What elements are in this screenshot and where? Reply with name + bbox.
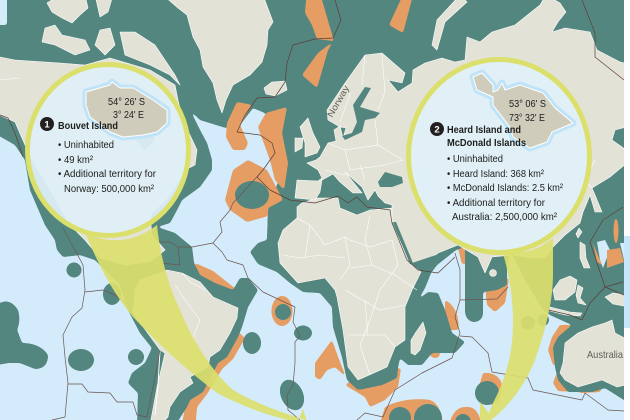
text block: Bouvet Island: • Additional territory for [58, 169, 157, 180]
text block: Heard Island and McDonald Islands: • Additional territory for [447, 198, 546, 209]
Taiwan and Philippines [576, 228, 582, 238]
callout circle 1 [28, 64, 188, 236]
text block: Heard Island and McDonald Islands: McDonald Islands [447, 138, 526, 149]
text block: Heard Island and McDonald Islands: • Uninhabited [447, 154, 503, 165]
Africa [278, 198, 421, 380]
map label: Norway: Norway [325, 83, 352, 119]
text block: Bouvet Island: • Uninhabited [58, 140, 114, 151]
Eurasia [295, 0, 630, 273]
Novaya Zemlya [432, 0, 467, 50]
coordinates: Heard Island: 53° 06' S [509, 99, 546, 110]
Greenland [163, 0, 273, 113]
text block: Bouvet Island [40, 117, 157, 195]
coordinates: Bouvet: 3° 24' E [113, 110, 144, 121]
text block: Heard Island and McDonald Islands: Heard Island and [447, 125, 521, 136]
Caspian Sea [423, 170, 431, 196]
Iceland [264, 81, 287, 96]
inland seas [135, 87, 445, 268]
map label: Australia: Australia [587, 349, 623, 361]
coordinates: Bouvet [108, 97, 145, 121]
callout pointer: Bouvet Island [86, 225, 308, 420]
open ocean pockets in the western Pacific [593, 219, 624, 268]
right edge strip [624, 0, 630, 420]
text block: Bouvet Island: • 49 km² [58, 155, 94, 166]
New Guinea [605, 293, 630, 308]
callout pointer: Heard Island [480, 238, 553, 420]
overlapping claims: orange zones in the North Atlantic and Arctic [225, 0, 502, 420]
Sulawesi and eastern islands [576, 285, 586, 305]
text block: Heard Island and McDonald Islands [430, 122, 564, 223]
Java and Lesser Sunda [550, 307, 582, 316]
island zones: teal blobs [0, 181, 549, 420]
text block: Heard Island and McDonald Islands: • Heard Island: 368 km² [447, 169, 545, 180]
text block: Heard Island and McDonald Islands: Australia: 2,500,000 km² [452, 212, 558, 223]
text block: Bouvet Island: 1 [44, 120, 50, 130]
callout circle 2 [408, 60, 590, 252]
text block: Heard Island and McDonald Islands: 2 [434, 124, 440, 136]
Arctic Canada islands [47, 0, 88, 23]
Madagascar [411, 322, 426, 355]
coordinates: Bouvet: 54° 26' S [108, 97, 145, 108]
United Kingdom [300, 118, 320, 157]
Borneo [553, 276, 577, 300]
South America [133, 270, 238, 420]
coordinates: Heard Island: 73° 32' E [509, 113, 545, 124]
overlapping claims beneath the coastal zones [181, 240, 606, 420]
island map: Heard and McDonald [473, 73, 573, 148]
Sri Lanka [490, 270, 496, 276]
North America [0, 56, 197, 265]
Ireland [295, 138, 303, 152]
Australia [560, 320, 630, 387]
text block: Bouvet Island: Bouvet Island [58, 121, 118, 132]
coordinates: Heard Island [509, 99, 546, 124]
text block: Bouvet Island: Norway: 500,000 km² [64, 184, 155, 195]
text block: Heard Island and McDonald Islands: • McDonald Islands: 2.5 km² [447, 183, 564, 194]
island map: Bouvet [86, 82, 167, 137]
